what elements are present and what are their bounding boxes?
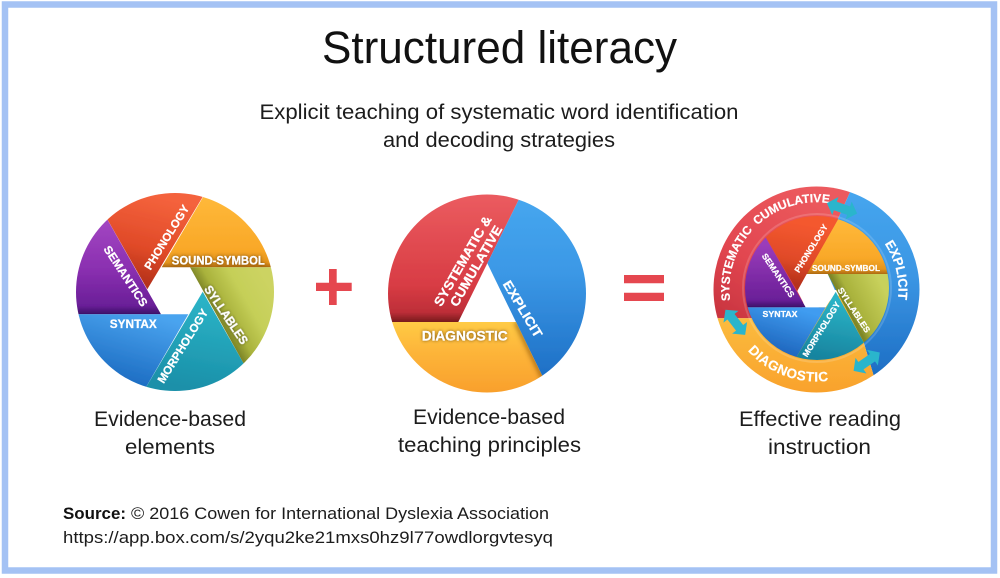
arrow: explicit to diagnostic <box>848 345 885 379</box>
ring label: explicit: EXPLICIT <box>885 240 908 300</box>
caption: principles: Evidence-based <box>413 406 565 429</box>
caption: effective reading: instruction <box>768 436 871 459</box>
source note <box>63 504 553 547</box>
caption: principles <box>398 406 581 457</box>
arrow: systematic to diagnostic <box>718 304 753 341</box>
source note: https://app.box.com/s/2yqu2ke21mxs0hz9l77owdlorgvtesyq <box>63 528 553 547</box>
ring label: diagnostic: DIAGNOSTIC <box>748 344 828 382</box>
label: diagnostic: DIAGNOSTIC <box>422 328 508 344</box>
wheel: teaching principles <box>388 194 586 392</box>
outer ring <box>714 186 920 392</box>
label: sound-symbol: SOUND-SYMBOL <box>172 256 265 268</box>
label: explicit: EXPLICIT <box>500 278 546 340</box>
caption: effective reading: Effective reading <box>739 408 901 431</box>
arrow: systematic to explicit <box>824 194 860 222</box>
inner label: morphology: MORPHOLOGY <box>800 300 842 359</box>
label: cumulative: CUMULATIVE <box>447 223 505 309</box>
source note: © 2016 Cowen for International Dyslexia Association <box>131 504 549 523</box>
equals sign <box>624 275 664 301</box>
inner label: syntax: SYNTAX <box>762 309 798 319</box>
label: syllables: SYLLABLES <box>201 284 249 347</box>
label: syntax: SYNTAX <box>110 319 157 331</box>
inner wheel <box>745 216 889 360</box>
title: Structured literacy <box>322 22 677 73</box>
subtitle: and decoding strategies <box>383 128 615 152</box>
plus sign <box>316 269 352 305</box>
inner label: syllables: SYLLABLES <box>836 285 873 335</box>
inner label: phonology: PHONOLOGY <box>792 222 830 274</box>
subtitle: Explicit teaching of systematic word identification <box>260 100 738 124</box>
label: semantics: SEMANTICS <box>101 244 149 309</box>
source note: Source: <box>63 504 126 523</box>
caption: effective reading <box>739 408 901 459</box>
caption: elements: Evidence-based <box>94 408 246 431</box>
caption: elements: elements <box>125 436 215 459</box>
caption: elements <box>94 408 246 459</box>
caption: principles: teaching principles <box>398 434 581 457</box>
label: systematic: SYSTEMATIC & <box>431 213 495 309</box>
wheel: evidence-based elements <box>76 193 274 391</box>
inner label: semantics: SEMANTICS <box>760 251 797 300</box>
subtitle <box>260 100 738 152</box>
ring label: systematic cumulative: SYSTEMATIC CUMULATIVE <box>721 194 830 301</box>
wheel: effective reading instruction <box>714 186 920 392</box>
inner label: sound-symbol: SOUND-SYMBOL <box>812 263 880 273</box>
label: phonology: PHONOLOGY <box>143 203 192 272</box>
label: morphology: MORPHOLOGY <box>156 307 211 386</box>
